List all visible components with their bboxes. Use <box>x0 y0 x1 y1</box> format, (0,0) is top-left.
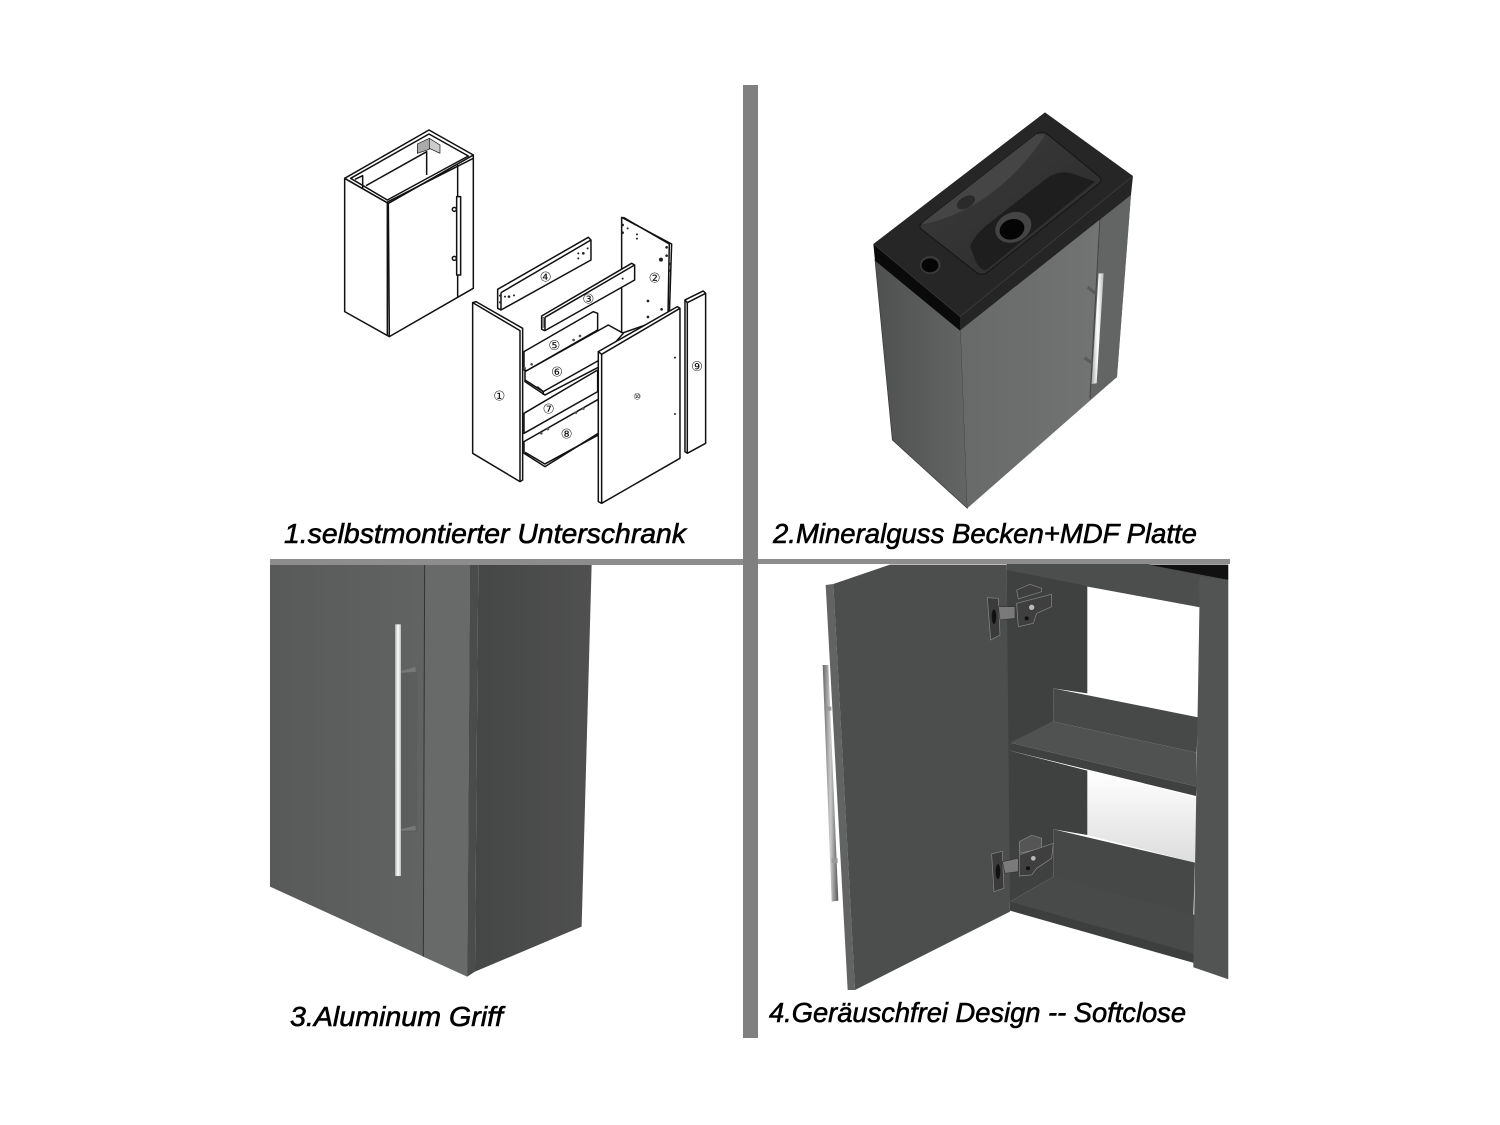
upper hinge <box>987 584 1052 640</box>
handle <box>1092 273 1104 384</box>
panel 2: cabinet with black mineral cast basin <box>873 112 1133 508</box>
upper window <box>1087 587 1200 717</box>
left horizontal divider <box>270 559 743 565</box>
assembled cabinet line drawing <box>345 130 473 337</box>
bowl floor <box>970 172 1095 270</box>
part 2: back side panel <box>621 217 672 333</box>
parts 5 to 8: shelves: ⑤ <box>548 339 560 354</box>
right strip <box>1090 195 1131 400</box>
lower shelf back <box>1053 829 1195 917</box>
cabinet front face <box>961 195 1131 508</box>
top board <box>1007 564 1228 607</box>
front face <box>270 565 470 977</box>
right horizontal divider <box>758 559 1230 564</box>
part 9: side strip: ⑨ <box>691 360 703 375</box>
caption 2: 2.Mineralguss Becken+MDF Platte <box>772 518 1197 549</box>
lower window <box>1087 771 1196 863</box>
parts 5 to 8: shelves <box>523 312 623 467</box>
parts 5 to 8: shelves: ⑧ <box>561 428 573 443</box>
part 3: lower rail: ③ <box>582 292 594 307</box>
door seam <box>1090 218 1100 399</box>
caption 3: 3.Aluminum Griff <box>290 1001 506 1032</box>
cabinet corner <box>467 565 478 977</box>
lower shelf front <box>1010 902 1195 963</box>
handle <box>823 665 838 902</box>
lower hinge <box>992 835 1053 892</box>
handle bar <box>395 624 401 876</box>
drain <box>990 206 1036 248</box>
panel 3: aluminium handle close-up <box>270 565 592 977</box>
upper shelf top <box>1010 722 1197 787</box>
lower shelf top <box>1010 877 1195 958</box>
part 9: side strip <box>685 291 706 453</box>
handle standoffs <box>401 667 416 831</box>
part 3: lower rail <box>542 263 635 331</box>
caption 1: 1.selbstmontierter Unterschrank <box>284 518 688 549</box>
right side face <box>475 565 592 972</box>
upper shelf back <box>1053 688 1198 753</box>
part 1: side panel <box>473 302 523 482</box>
upper shelf front <box>1010 743 1197 796</box>
right side board <box>1193 577 1228 979</box>
door inner face <box>833 565 1010 990</box>
parts 5 to 8: shelves: ⑦ <box>543 403 555 418</box>
part 4: upper rail: ④ <box>540 271 552 286</box>
basin top surface <box>873 112 1133 317</box>
door front edge <box>826 584 855 990</box>
part 2: back side panel: ② <box>649 271 661 286</box>
parts 5 to 8: shelves: ⑥ <box>551 366 563 381</box>
vertical divider <box>743 85 758 1038</box>
tap hole <box>920 256 941 274</box>
handle standoffs <box>1084 286 1099 367</box>
basin thickness <box>873 244 960 331</box>
black top sliver <box>1148 565 1228 580</box>
part 10: door panel <box>598 307 680 503</box>
handle shadow <box>401 672 417 832</box>
overflow <box>954 192 977 212</box>
panel 1: assembly diagram <box>345 130 706 503</box>
interior wall <box>1007 570 1087 913</box>
part 1: side panel: ① <box>493 389 505 404</box>
upper bowl wall <box>922 134 1045 224</box>
panel 4: open door with soft-close hinges <box>823 564 1228 990</box>
door seam <box>423 565 425 957</box>
caption 4: 4.Geräuschfrei Design -- Softclose <box>769 997 1186 1028</box>
part 4: upper rail <box>498 237 591 310</box>
cabinet left face <box>875 260 967 508</box>
basin bowl <box>920 132 1101 274</box>
part 10: door panel: ⑩ <box>633 392 641 402</box>
lighter side strip <box>423 565 470 977</box>
